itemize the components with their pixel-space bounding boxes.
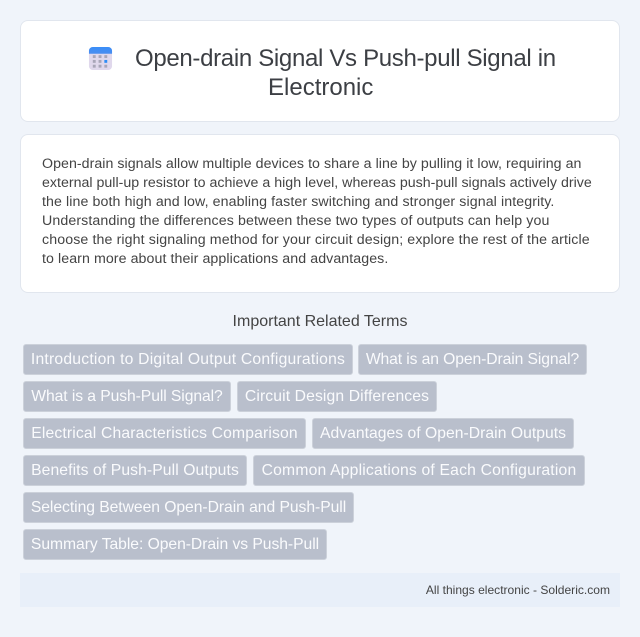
panel: description [20,134,620,293]
text block: description: the line both high and low, enabling faster switching and stronger signal integrity. [42,194,554,210]
chip [23,381,231,412]
footer credit: All things electronic - Solderic.com [426,583,610,597]
chip: Benefits of Push-Pull Outputs [31,462,239,479]
panel: title header [20,20,620,122]
chip [237,381,437,412]
title: Open-drain Signal Vs Push-pull Signal in [135,45,556,72]
chip [23,529,327,560]
chip [23,455,247,486]
text block: description: to learn more about their applications and advantages. [42,251,388,267]
chip: Circuit Design Differences [245,388,429,405]
chip [23,344,353,375]
title [135,45,556,101]
chip: Electrical Characteristics Comparison [31,425,298,442]
chip: Introduction to Digital Output Configurations [31,351,345,368]
text block: description: Understanding the differences between these two types of outputs can help you [42,213,549,229]
panel: term chips [23,344,587,560]
icon: calendar [88,47,112,70]
chip: What is an Open-Drain Signal? [366,351,579,368]
text block: description: choose the right signaling method for your circuit design; explore the rest of the article [42,232,590,248]
chip [312,418,574,449]
chip: Selecting Between Open-Drain and Push-Pull [31,499,346,516]
chip [253,455,585,486]
heading: related terms: Important Related Terms [233,313,407,330]
footer [20,573,620,607]
chip [358,344,587,375]
chip [23,492,354,523]
chip [23,418,306,449]
chip: Advantages of Open-Drain Outputs [320,425,566,442]
text block: description [42,156,592,267]
title: Electronic [268,74,373,101]
chip: Common Applications of Each Configuration [262,462,576,479]
text block: description: external pull-up resistor to achieve a high level, whereas push-pull signals actively drive [42,175,592,191]
chip: What is a Push-Pull Signal? [31,388,223,405]
text block: description: Open-drain signals allow multiple devices to share a line by pulling it low, requiring an [42,156,581,172]
chip: Summary Table: Open-Drain vs Push-Pull [31,536,319,553]
